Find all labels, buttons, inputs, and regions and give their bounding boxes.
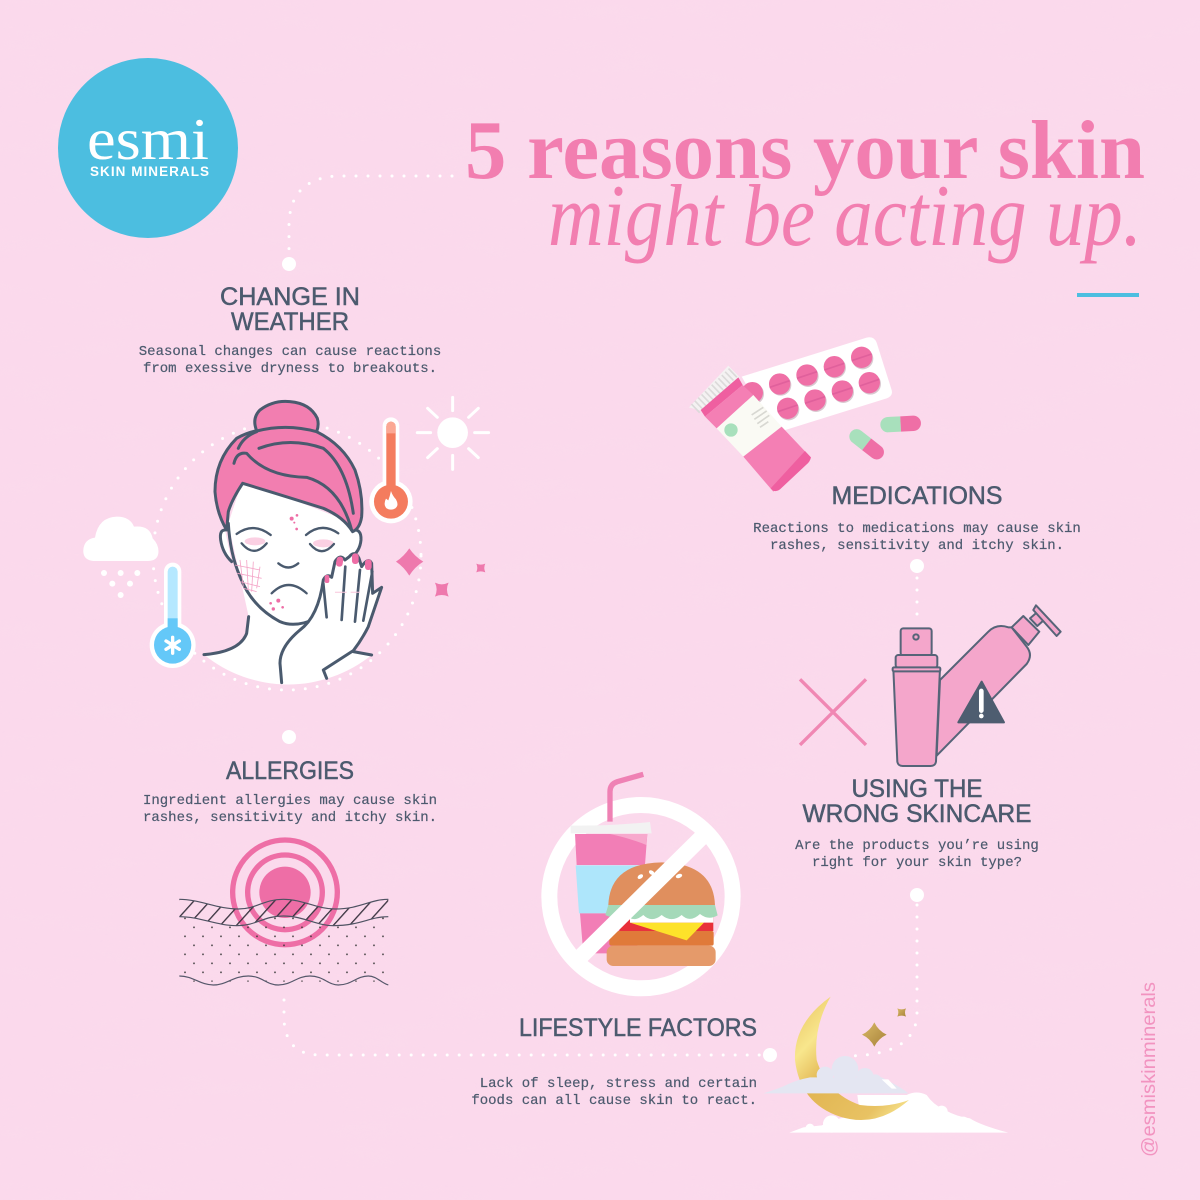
dotted connector paths xyxy=(153,176,917,1056)
section: allergies text: rashes, sensitivity and itchy skin. xyxy=(143,810,437,826)
hot thermometer xyxy=(369,417,413,523)
title accent rule xyxy=(1077,293,1139,297)
section: change in weather text xyxy=(139,283,441,377)
pump bottle xyxy=(937,626,1030,756)
ears xyxy=(220,530,361,562)
illustration: pill bottle, blister pack and capsules xyxy=(689,337,921,492)
section: using the wrong skincare text: WRONG SKINCARE xyxy=(802,800,1032,828)
warning sign xyxy=(958,682,1004,722)
section: using the wrong skincare text: USING THE xyxy=(852,775,982,803)
knuckle marks xyxy=(335,591,360,594)
logo: esmi xyxy=(87,106,209,172)
section: medications text: Reactions to medications may cause skin xyxy=(753,521,1081,537)
straw xyxy=(610,774,643,822)
skin base xyxy=(204,480,372,684)
neck and shoulder lines xyxy=(204,617,372,655)
capsule horizontal xyxy=(880,415,921,433)
blemishes xyxy=(269,514,298,611)
burger xyxy=(605,862,718,966)
section: change in weather text: from exessive dryness to breakouts. xyxy=(143,361,437,377)
spray bottle xyxy=(901,628,932,656)
logo xyxy=(58,58,238,238)
social handle: @esmiskinminerals xyxy=(1139,982,1160,1157)
section: lifestyle factors text xyxy=(471,1014,757,1109)
node dot: lifestyle factors xyxy=(763,1048,777,1062)
section: lifestyle factors text: Lack of sleep, stress and certain xyxy=(480,1076,757,1092)
node dot: allergies xyxy=(282,730,296,744)
prohibition slash xyxy=(581,837,702,957)
white cloud xyxy=(789,1092,1008,1133)
nails xyxy=(325,553,372,583)
finger lines xyxy=(323,567,372,622)
cup xyxy=(571,822,652,953)
illustration: moon, stars and clouds xyxy=(763,997,1008,1133)
section: using the wrong skincare text: right for your skin type? xyxy=(812,855,1022,871)
hair xyxy=(215,401,362,532)
section: allergies text xyxy=(143,757,437,826)
dermis dots xyxy=(179,916,388,982)
section: medications text: MEDICATIONS xyxy=(832,482,1002,510)
capsule diagonal xyxy=(846,426,887,462)
grey cloud xyxy=(763,1056,908,1093)
cloud with snow xyxy=(83,517,158,598)
pill bottle xyxy=(689,366,811,492)
section: change in weather text: CHANGE IN xyxy=(220,283,360,311)
dry skin cracks xyxy=(235,560,262,592)
blister pack xyxy=(742,337,892,431)
illustration: woman with irritated skin and weather icons xyxy=(83,397,489,684)
illustration: wrong skincare bottles xyxy=(800,605,1061,766)
cross xyxy=(800,679,866,745)
section: using the wrong skincare text xyxy=(795,775,1039,871)
section: lifestyle factors text: LIFESTYLE FACTORS xyxy=(519,1014,757,1042)
skin layer outlines xyxy=(179,899,388,926)
section: change in weather text: Seasonal changes can cause reactions xyxy=(139,344,441,360)
section: medications text: rashes, sensitivity and itchy skin. xyxy=(770,538,1064,554)
prohibition ring xyxy=(549,805,733,988)
section: allergies text: Ingredient allergies may cause skin xyxy=(143,793,437,809)
section: allergies text: ALLERGIES xyxy=(226,757,354,785)
eyes xyxy=(237,528,338,551)
node dot: change in weather xyxy=(282,257,296,271)
nose and mouth xyxy=(272,563,307,593)
hand xyxy=(280,554,382,683)
logo: SKIN MINERALS xyxy=(90,164,209,179)
sparkles xyxy=(396,548,485,597)
sun xyxy=(417,397,489,469)
section: medications text xyxy=(753,482,1081,554)
target rings xyxy=(233,840,337,945)
section: using the wrong skincare text: Are the products you’re using xyxy=(795,838,1039,854)
face outline xyxy=(228,523,317,624)
crescent moon xyxy=(795,997,909,1120)
skin layer hatching xyxy=(179,899,388,926)
section: lifestyle factors text: foods can all cause skin to react. xyxy=(471,1093,757,1109)
illustration: skin layers with allergic reaction xyxy=(179,840,388,985)
node dot: wrong skincare xyxy=(910,888,924,902)
cold thermometer xyxy=(150,563,196,668)
title xyxy=(465,104,1145,265)
hair strands xyxy=(234,427,353,530)
lower wave xyxy=(179,976,388,985)
illustration: fast food crossed out xyxy=(549,774,733,988)
section: change in weather text: WEATHER xyxy=(231,308,349,336)
gold sparkles xyxy=(862,1008,906,1047)
white cloud top accent xyxy=(882,1079,897,1089)
title: 5 reasons your skin xyxy=(465,104,1145,197)
node dot: medications xyxy=(910,559,924,573)
